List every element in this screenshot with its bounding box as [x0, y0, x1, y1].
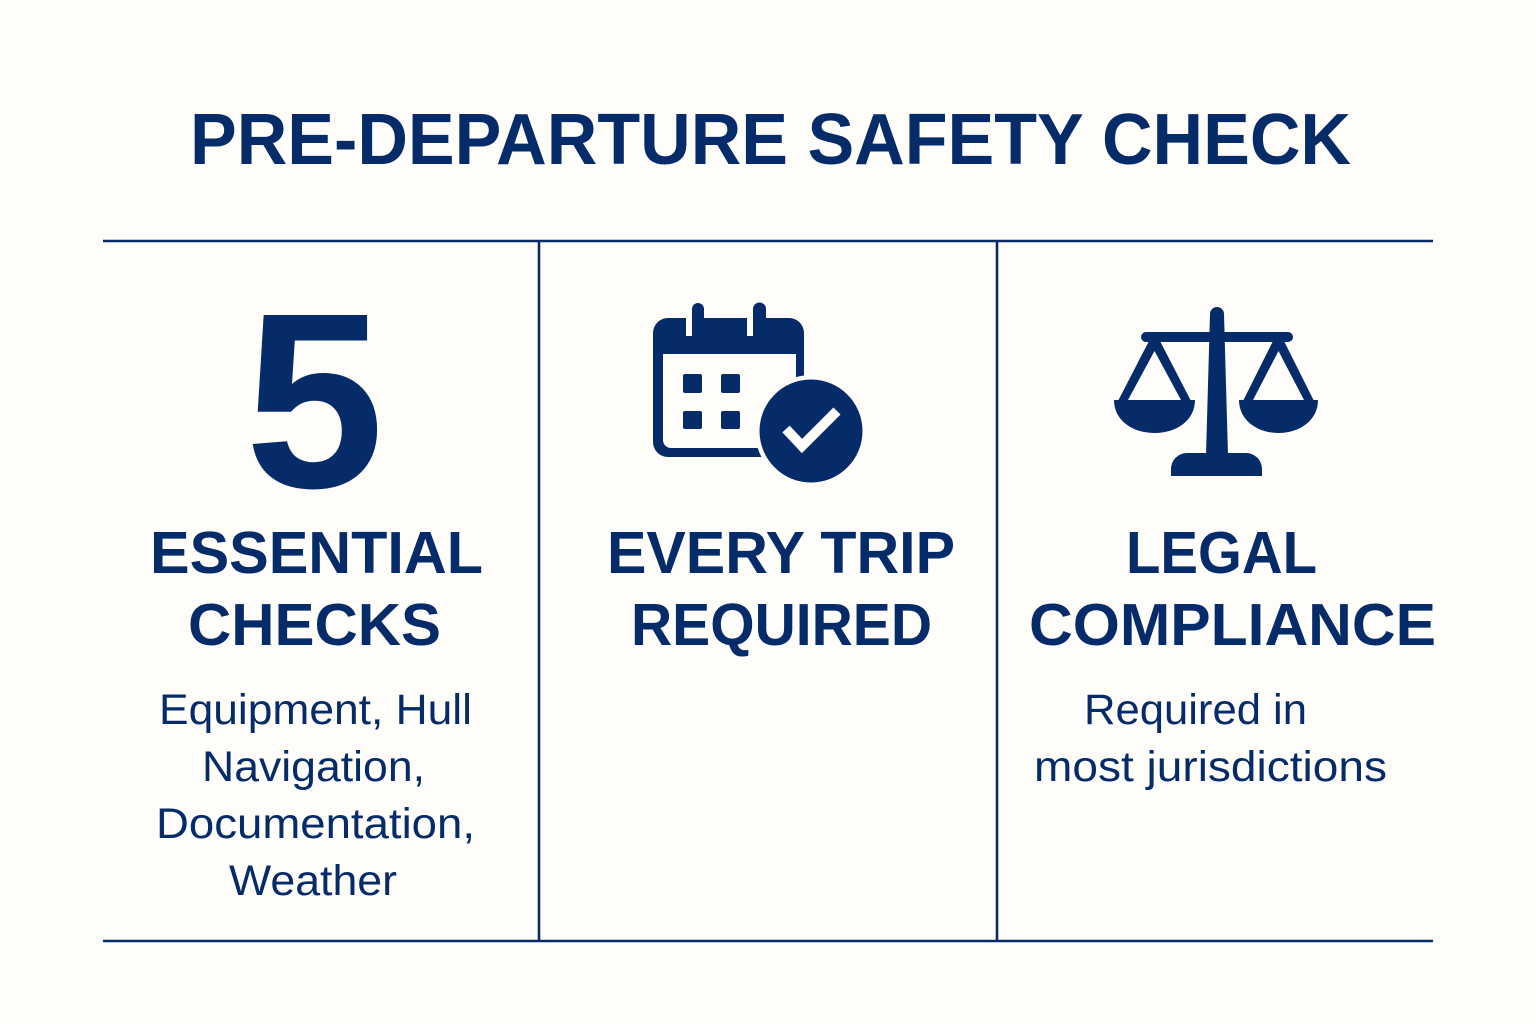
- icon: calendar with check mark: [653, 302, 867, 487]
- text: list of checks: Navigation,: [202, 743, 425, 791]
- panel: legal compliance: [1029, 307, 1436, 791]
- text: list of checks: Documentation,: [156, 800, 475, 848]
- title: PRE-DEPARTURE SAFETY CHECK: [190, 100, 1351, 180]
- heading: every trip required: [607, 520, 955, 658]
- heading: every trip required: REQUIRED: [631, 592, 932, 658]
- text: list of checks: [156, 686, 475, 905]
- heading: legal compliance: [1029, 520, 1436, 658]
- text: list of checks: Equipment, Hull: [159, 686, 472, 734]
- text: list of checks: Weather: [229, 857, 397, 905]
- heading: every trip required: EVERY TRIP: [607, 520, 955, 586]
- text: required in most jurisdictions: Required in: [1084, 686, 1307, 734]
- text: required in most jurisdictions: most jurisdictions: [1034, 743, 1387, 791]
- big number 5: 5: [245, 261, 384, 540]
- heading: essential checks: [150, 520, 483, 658]
- heading: legal compliance: LEGAL: [1126, 520, 1317, 586]
- icon: scales of justice: [1114, 307, 1318, 476]
- panel: every trip required: [607, 302, 955, 658]
- panel: essential checks: [150, 261, 483, 905]
- heading: essential checks: ESSENTIAL: [150, 520, 483, 586]
- heading: legal compliance: COMPLIANCE: [1029, 592, 1436, 658]
- heading: essential checks: CHECKS: [188, 592, 441, 658]
- text: required in most jurisdictions: [1034, 686, 1387, 791]
